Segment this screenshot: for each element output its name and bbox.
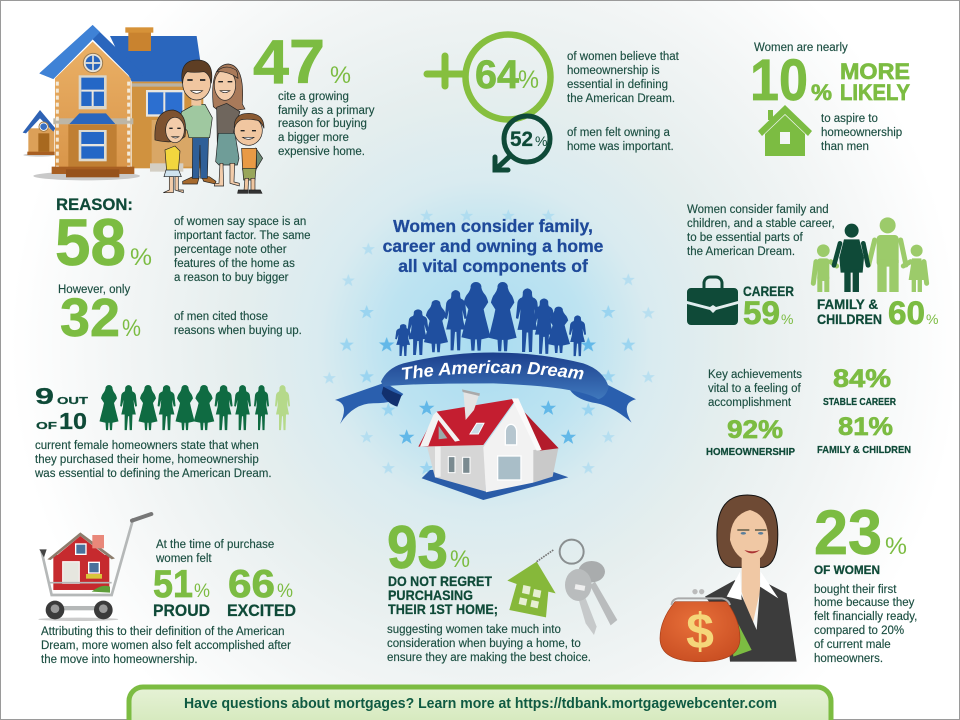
stat: 9 out of 10: was essential to defining the American Dream.	[34, 468, 272, 480]
stat: proud and excited: Dream, more women also felt accomplished after	[41, 640, 291, 652]
icon: female symbol 64%: 64	[475, 53, 520, 97]
stat: 9 out of 10	[34, 383, 290, 480]
icon: briefcase	[687, 277, 738, 325]
text: 64% and 52% description: home was important.	[567, 141, 674, 153]
stat: career 59%: CAREER	[743, 284, 794, 299]
stat: 10% more likely	[750, 42, 910, 156]
women silhouettes above ribbon	[395, 282, 586, 356]
stat: 93% do not regret: consideration when buying a home, to	[387, 638, 581, 650]
stat: 93% do not regret: DO NOT REGRET	[388, 573, 492, 589]
key achievements: 92%	[727, 416, 783, 444]
stat: however only 32%: However, only	[58, 284, 130, 296]
stat: 23% of women: of current male	[814, 639, 891, 651]
stat: career 59%	[743, 284, 794, 331]
stat: career 59%: 59	[743, 295, 780, 331]
boy	[234, 113, 264, 193]
star field	[323, 209, 655, 474]
stat: 93% do not regret: suggesting women take much into	[387, 624, 561, 636]
stat: 10% more likely: than men	[821, 141, 869, 153]
stat: reason 58%: features of the home as	[174, 258, 295, 270]
stat: proud and excited: %	[194, 581, 210, 602]
stat: however only 32%	[58, 284, 302, 348]
stat: 10% more likely: LIKELY	[840, 80, 910, 105]
stat: reason 58%: %	[130, 244, 152, 271]
illustration: house in shopping cart	[38, 514, 151, 621]
man	[178, 60, 216, 184]
stat: 47% growing family	[253, 28, 375, 158]
stat: 47% growing family: %	[330, 62, 351, 89]
stat: reason 58%: 58	[55, 205, 126, 279]
stat: family and children 60%: CHILDREN	[817, 312, 882, 327]
stat: 47% growing family: 47	[253, 28, 325, 97]
stat: proud and excited: 66	[228, 563, 275, 606]
stat: 47% growing family: reason for buying	[278, 118, 367, 130]
stat: 23% of women: 23	[814, 498, 882, 568]
key achievements: 81%	[838, 413, 893, 441]
stat: 9 out of 10: 10	[59, 408, 87, 434]
text: 64% and 52% description: of men felt owning a	[567, 127, 671, 139]
woman	[213, 64, 245, 186]
stat: family and children 60%: 60	[888, 295, 925, 331]
stat: 9 out of 10: current female homeowners state that when	[35, 440, 259, 452]
stat: career 59%: %	[781, 311, 793, 327]
stat: proud and excited: EXCITED	[227, 601, 296, 620]
illustration: family of four	[155, 60, 264, 193]
stat: reason 58%: important factor. The same	[174, 230, 311, 242]
small side house	[23, 110, 55, 155]
stat: proud and excited: women felt	[155, 553, 212, 565]
women silhouettes row	[100, 385, 290, 430]
stat: 9 out of 10: they purchased their home, homeownership	[35, 454, 259, 466]
key achievements: STABLE CAREER	[823, 396, 896, 408]
stat: proud and excited: Attributing this to their definition of the American	[41, 626, 285, 638]
text: 64% and 52% description: the American Dream.	[567, 93, 675, 105]
stat: 93% do not regret: THEIR 1ST HOME;	[388, 601, 498, 617]
stat: 47% growing family: cite a growing	[278, 91, 349, 103]
stat: 93% do not regret: ensure they are making the best choice.	[387, 652, 591, 664]
stat: 10% more likely: to aspire to	[821, 113, 878, 125]
key achievements: vital to a feeling of	[708, 383, 802, 395]
icon: male symbol 52%: 52	[510, 128, 533, 151]
stat: reason 58%: of women say space is an	[174, 216, 306, 228]
icon: house	[758, 105, 812, 156]
girl	[155, 110, 186, 193]
stat: 23% of women: felt financially ready,	[814, 611, 917, 623]
stat: 47% growing family: a bigger more	[278, 132, 349, 144]
text: family and career intro: Women consider family and	[687, 204, 829, 216]
stat: proud and excited	[41, 539, 296, 666]
text: family and career intro: the American Dream.	[687, 246, 795, 258]
icon: female symbol 64%: %	[518, 66, 539, 94]
center heading: career and owning a home	[383, 236, 604, 256]
key achievements: HOMEOWNERSHIP	[706, 446, 795, 458]
stat: reason 58%: a reason to buy bigger	[174, 272, 289, 284]
stat: reason 58%	[55, 195, 311, 284]
stat: 23% of women: %	[885, 533, 907, 560]
footer banner: Have questions about mortgages? Learn more at https://tdbank.mortgagewebcenter.com	[184, 696, 777, 712]
stat: proud and excited: the move into homeownership.	[41, 654, 198, 666]
stat: 23% of women: home because they	[814, 597, 915, 609]
center heading	[383, 216, 604, 276]
stat: 47% growing family: family as a primary	[278, 105, 375, 117]
center heading: all vital components of	[398, 256, 588, 276]
ribbon banner: The American Dream: The American Dream	[402, 360, 584, 380]
stat: 23% of women: bought their first	[814, 584, 897, 596]
key achievements: FAMILY & CHILDREN	[817, 444, 911, 456]
stat: 47% growing family: expensive home.	[278, 146, 365, 158]
stat: proud and excited: At the time of purchase	[156, 539, 274, 551]
footer banner	[129, 687, 831, 720]
stat: 10% more likely: 10	[750, 48, 808, 113]
text: family and career intro: children, and a stable career,	[687, 218, 835, 230]
stat: 23% of women: compared to 20%	[814, 625, 904, 637]
key achievements: Key achievements	[708, 369, 802, 381]
icon: family	[813, 217, 927, 292]
stat: 10% more likely: %	[811, 80, 832, 105]
stat: 23% of women: homeowners.	[814, 653, 883, 665]
center heading: Women consider family,	[393, 216, 593, 236]
stat: 10% more likely: homeownership	[821, 127, 902, 139]
stat: however only 32%: 32	[60, 288, 120, 348]
stat: reason 58%: REASON:	[56, 195, 133, 214]
stat: 23% of women	[814, 498, 917, 665]
key achievements: 84%	[833, 365, 891, 393]
stat: family and children 60%	[817, 295, 938, 331]
illustration: orange house with blue roof	[23, 25, 203, 180]
stat: 9 out of 10: 9	[35, 383, 54, 409]
stat: 9 out of 10: OF	[36, 420, 58, 432]
stat: 23% of women: OF WOMEN	[814, 563, 880, 577]
illustration: woman with purse: $	[686, 603, 714, 659]
stat: 9 out of 10: OUT	[57, 395, 89, 407]
text: family and career intro: to be essential parts of	[687, 232, 804, 244]
stat: 10% more likely: MORE	[840, 59, 910, 84]
illustration: white house with red roof	[418, 389, 568, 500]
stat: proud and excited: %	[277, 581, 293, 602]
stat: however only 32%: %	[122, 315, 141, 342]
stat: proud and excited: PROUD	[153, 601, 210, 620]
stat: 93% do not regret	[387, 514, 591, 664]
text: 64% and 52% description	[567, 51, 680, 153]
text: 64% and 52% description: essential in defining	[567, 79, 668, 91]
stat: reason 58%: percentage note other	[174, 244, 287, 256]
stat: 93% do not regret: 93	[387, 514, 448, 581]
icon: female symbol 64%	[427, 34, 550, 120]
ribbon banner: The American Dream	[335, 352, 636, 424]
illustration: woman with purse	[660, 495, 797, 662]
stat: however only 32%: reasons when buying up.	[174, 325, 302, 337]
stat: proud and excited: 51	[153, 563, 193, 606]
key achievements	[706, 365, 911, 458]
key achievements: accomplishment	[708, 397, 792, 409]
icon: house keychain	[507, 540, 617, 635]
stat: 93% do not regret: %	[450, 546, 470, 573]
icon: male symbol 52%	[495, 116, 550, 170]
stat: however only 32%: of men cited those	[174, 311, 268, 323]
stat: 93% do not regret: PURCHASING	[388, 587, 473, 603]
stat: family and children 60%: FAMILY &	[817, 297, 878, 312]
text: 64% and 52% description: homeownership is	[567, 65, 660, 77]
stat: 10% more likely: Women are nearly	[754, 42, 848, 54]
icon: male symbol 52%: %	[535, 133, 547, 149]
stat: family and children 60%: %	[926, 311, 938, 327]
text: 64% and 52% description: of women believe that	[567, 51, 680, 63]
